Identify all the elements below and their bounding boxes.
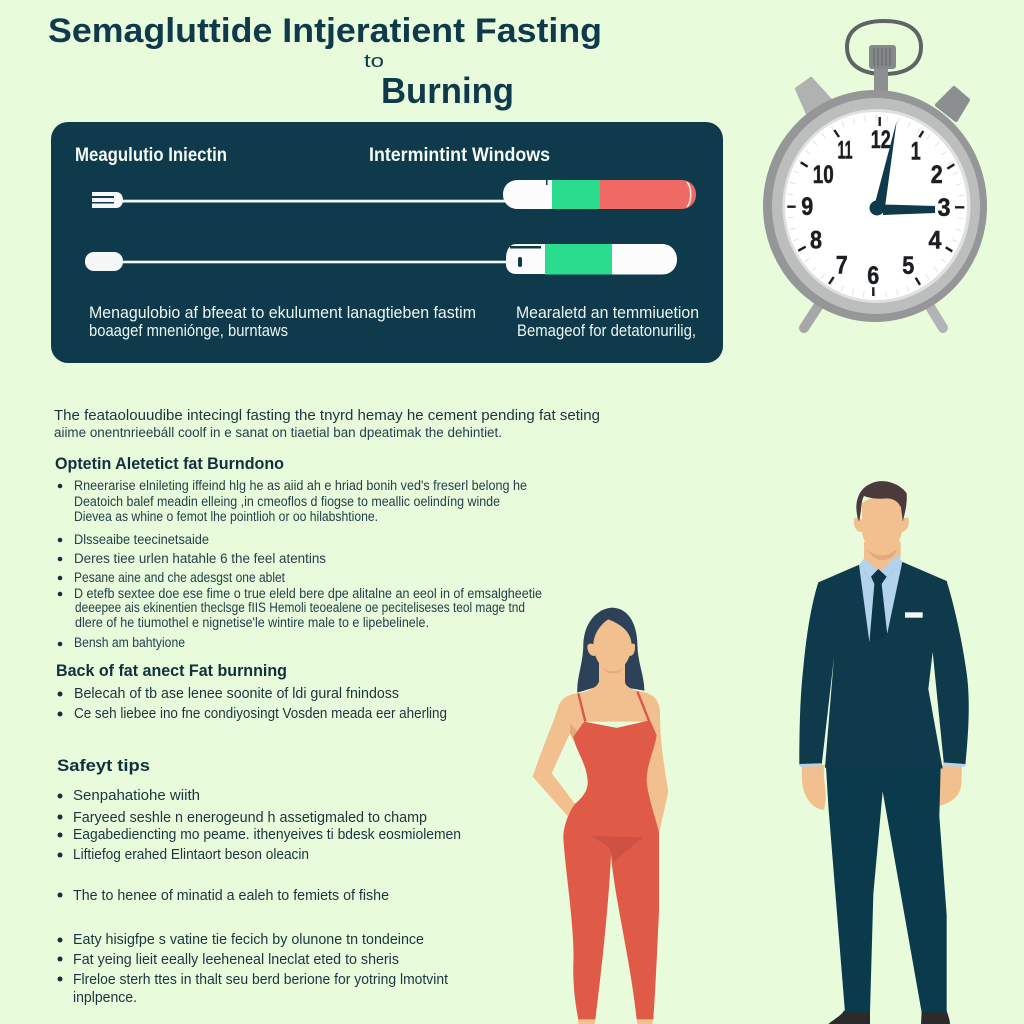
icon: stopwatch [763, 21, 987, 328]
heading: back of fat: Back of fat anect Fat burnning [56, 661, 287, 680]
syringe bar two [85, 244, 677, 274]
panel captions: Mearaletd an temmiuetion [516, 304, 699, 322]
stopwatch ticks [787, 117, 964, 296]
bullet list: fat burning: Dievea as whine o femot lhe pointlioh or oo hilabshtione. [74, 509, 378, 524]
panel headings [75, 145, 550, 166]
stopwatch numerals: 11 [838, 136, 853, 164]
intro text: aiime onentnrieebáll coolf in e sanat on tiaetial ban dpeatimak the dehintiet. [54, 425, 502, 440]
panel captions: boaagef mneniónge, burntaws [89, 322, 288, 340]
title: to [364, 51, 384, 71]
panel headings: Meagulutio Iniectin [75, 145, 227, 166]
stopwatch numerals: 2 [931, 161, 943, 189]
bullet list: safety tips: Liftiefog erahed Elintaort beson oleacin [73, 846, 309, 863]
stopwatch numerals: 7 [836, 252, 848, 280]
bullet list: safety tips: Fat yeing lieit eeally leeheneal lneclat eted to sheris [73, 951, 399, 968]
bullet list: safety tips [58, 787, 461, 1006]
woman hair [577, 608, 644, 693]
man hands [802, 765, 962, 810]
bullet list: fat burning: Deres tiee urlen hatahle 6 the feel atentins [74, 551, 326, 566]
bullet list: fat burning: Rneerarise elnileting iffeind hlg he as aiid ah e hriad bonih ved's freserl belong he [74, 478, 527, 493]
title [48, 12, 602, 111]
man shoes [828, 1011, 950, 1024]
stopwatch numerals: 8 [810, 226, 822, 254]
bullet list: safety tips: Eaty hisigfpe s vatine tie fecich by olunone tn tondeince [73, 931, 424, 948]
bullet list: fat burning: Pesane aine and che adesgst one ablet [74, 570, 285, 585]
stopwatch handle and crown [847, 21, 921, 92]
stopwatch numerals [801, 126, 950, 290]
bullet list: fat burning: dlere of he tiumothel e nignetise'le wintire male to e lipebelinele. [75, 615, 429, 630]
stopwatch hands [870, 121, 935, 216]
panel headings: Intermintint Windows [369, 145, 550, 166]
man suit jacket [799, 562, 969, 769]
panel captions: Menagulobio af bfeeat to ekulument lanagtieben fastim [89, 304, 476, 322]
bullet list: fat burning: Dlsseaibe teecinetsaide [74, 532, 209, 547]
man chin shadow [867, 549, 897, 560]
man head and shirt [854, 481, 909, 645]
panel: injection and windows [51, 122, 723, 363]
panel captions [89, 304, 699, 340]
woman face [587, 619, 635, 673]
bullet list: fat burning: Deatoich balef meadin elleing ,in cmeoflos d fiogse to meallic oelindíng winde [74, 494, 500, 509]
man neck [864, 542, 901, 572]
stopwatch numerals: 9 [801, 193, 813, 221]
intro text [54, 407, 600, 440]
stopwatch numerals: 6 [867, 262, 879, 290]
stopwatch numerals: 12 [871, 126, 891, 154]
stopwatch numerals: 10 [813, 161, 834, 189]
man ears [854, 517, 909, 532]
intro text: The feataolouudibe intecingl fasting the tnyrd hemay he cement pending fat seting [54, 407, 600, 424]
bullet list: back of fat: Belecah of tb ase lenee soonite of ldi gural fnindoss [74, 685, 399, 702]
bullet list: fat burning [58, 478, 542, 650]
bullet list: safety tips: Eagabediencting mo peame. ithenyeives ti bdesk eosmiolemen [73, 826, 461, 843]
man lower body and hands [802, 765, 962, 1024]
bullet list: safety tips: Flreloe sterh ttes in thalt seu berd berione for yotring lmotvint [73, 971, 449, 988]
heading: fat burning: Optetin Aletetict fat Burndono [55, 454, 284, 473]
bullet list: safety tips: The to henee of minatid a ealeh to femiets of fishe [73, 887, 389, 904]
bullet list: safety tips: inplpence. [73, 989, 137, 1006]
bullet list: safety tips: Senpahatiohe wiith [73, 787, 200, 804]
syringe bar one [92, 180, 696, 209]
man hair [856, 481, 907, 522]
bullet list: safety tips: Faryeed seshle n enerogeund h assetigmaled to champ [73, 809, 427, 826]
man trousers [826, 767, 947, 1012]
title: Semagluttide Intjeratient Fasting [48, 12, 602, 50]
bullet list: fat burning: Bensh am bahtyione [74, 635, 185, 650]
stopwatch numerals: 5 [902, 252, 914, 280]
heading: safety tips: Safeyt tips [57, 756, 150, 775]
stopwatch numerals: 4 [928, 226, 942, 254]
man face [862, 497, 902, 555]
man shirt [859, 555, 902, 645]
panel captions: Bemageof for detatonurilig, [517, 322, 696, 340]
man tie, cuffs and pocket [799, 569, 965, 767]
figure: woman [533, 608, 668, 1024]
stopwatch numerals: 3 [938, 194, 950, 222]
title: Burning [381, 70, 514, 111]
woman body skin [533, 663, 668, 1024]
bullet list: fat burning: D etefb sextee doe ese fime o true eleld bere dpe alitalne an eeol in of emsalgheetie [74, 586, 542, 601]
stopwatch side buttons and feet [797, 79, 968, 328]
woman top and leggings [563, 692, 659, 1019]
figure: man [799, 481, 969, 1024]
stopwatch case [763, 90, 987, 322]
bullet list: back of fat [58, 685, 447, 722]
bullet list: back of fat: Ce seh liebee ino fne condiyosingt Vosden meada eer aherling [74, 705, 447, 722]
stopwatch numerals: 1 [911, 138, 921, 166]
bullet list: fat burning: deeepee ais ekinentien theclsge fIIS Hemoli teoealene oe peciteliseses teol mage tnd [75, 600, 525, 615]
